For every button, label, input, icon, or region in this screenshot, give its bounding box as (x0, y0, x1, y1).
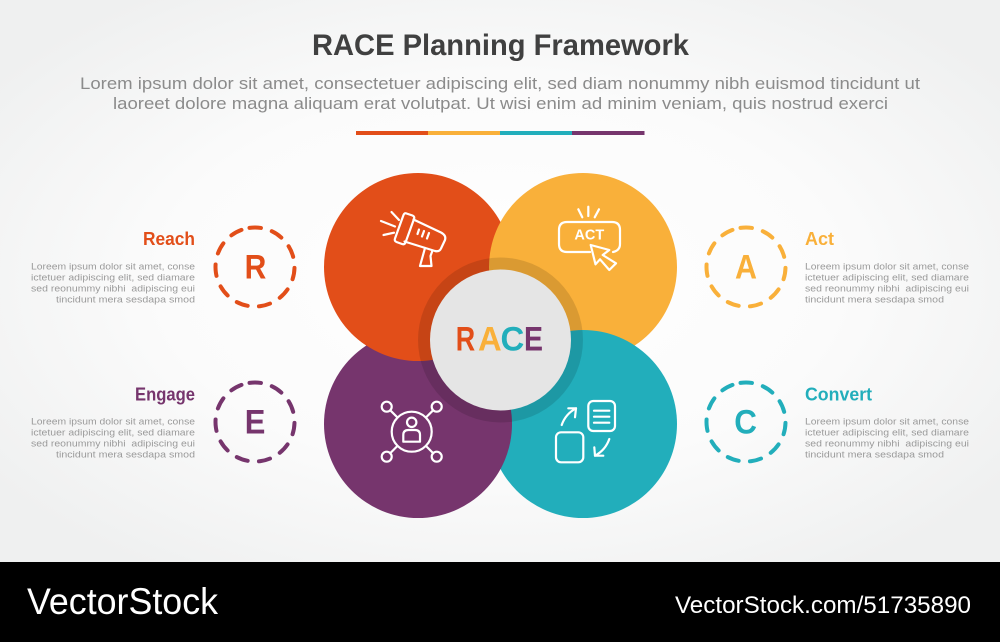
badge: C (701, 377, 791, 467)
icon: megaphone (381, 212, 445, 266)
text block: act: ictetuer adipiscing elit, sed diamare (805, 272, 969, 284)
center disc (430, 270, 571, 410)
badge: R: R (245, 248, 266, 286)
circle: act (489, 173, 677, 361)
text block: engage: ictetuer adipiscing elit, sed diamare (31, 428, 195, 438)
text block: reach (31, 262, 195, 306)
text block: engage (31, 416, 195, 460)
heading: act: Act (805, 229, 834, 249)
panel: convert (805, 384, 969, 460)
text block: reach: ictetuer adipiscing elit, sed diamare (31, 272, 195, 284)
circle: convert (489, 330, 677, 518)
footer bar (0, 562, 1000, 642)
text block: convert: ictetuer adipiscing elit, sed diamare (805, 428, 969, 438)
icon: act button with cursor: ACT (574, 228, 604, 244)
center label RACE: C (500, 320, 524, 358)
text block: reach: Loreem ipsum dolor sit amet, conse (31, 262, 195, 272)
heading: reach: Reach (143, 229, 195, 249)
center label RACE (456, 320, 543, 358)
subtitle text: laoreet dolore magna aliquam erat volutpat. Ut wisi enim ad minim veniam, quis nostrud exerci (113, 94, 888, 113)
text block: act: tincidunt mera sesdapa smod (805, 294, 944, 306)
footer logo text: VectorStock (27, 581, 218, 622)
heading: engage: Engage (135, 384, 195, 404)
text block: reach: sed reonummy nibhi adipiscing eui (31, 284, 195, 294)
panel: engage (31, 384, 195, 460)
text block: engage: Loreem ipsum dolor sit amet, conse (31, 416, 195, 428)
center ring (418, 258, 583, 422)
badge: E (210, 377, 300, 467)
circle: engage (324, 330, 512, 518)
title: RACE Planning Framework (312, 29, 689, 62)
icon: act button with cursor (559, 207, 620, 270)
text block: act (805, 262, 969, 306)
badge: A (701, 222, 791, 312)
icon: engage network person (382, 402, 442, 462)
text block: convert: Loreem ipsum dolor sit amet, conse (805, 416, 969, 428)
title underline colour bar (356, 131, 644, 135)
center label RACE: E (524, 320, 543, 358)
badge: C: C (734, 403, 757, 441)
panel: act (805, 229, 969, 306)
subtitle text: Lorem ipsum dolor sit amet, consectetuer adipiscing elit, sed diam nonummy nibh euismod tincidunt ut (80, 74, 920, 93)
center label RACE: R (456, 320, 475, 358)
subtitle text (80, 74, 920, 113)
badge: E: E (245, 403, 265, 441)
text block: reach: tincidunt mera sesdapa smod (56, 294, 195, 306)
circle: reach (324, 173, 512, 361)
text block: engage: tincidunt mera sesdapa smod (56, 450, 195, 460)
text block: convert: sed reonummy nibhi adipiscing eui (805, 438, 969, 450)
icon: convert documents and arrows (556, 401, 615, 462)
text block: convert (805, 416, 969, 460)
text block: engage: sed reonummy nibhi adipiscing eui (31, 438, 195, 450)
text block: convert: tincidunt mera sesdapa smod (805, 450, 944, 460)
panel: reach (31, 229, 195, 306)
heading: convert: Convert (805, 384, 872, 404)
text block: act: Loreem ipsum dolor sit amet, conse (805, 262, 969, 272)
footer url text: VectorStock.com/51735890 (675, 592, 971, 619)
center label RACE: A (478, 320, 502, 358)
badge: A: A (735, 248, 757, 286)
text block: act: sed reonummy nibhi adipiscing eui (805, 284, 969, 294)
badge: R (210, 222, 300, 312)
